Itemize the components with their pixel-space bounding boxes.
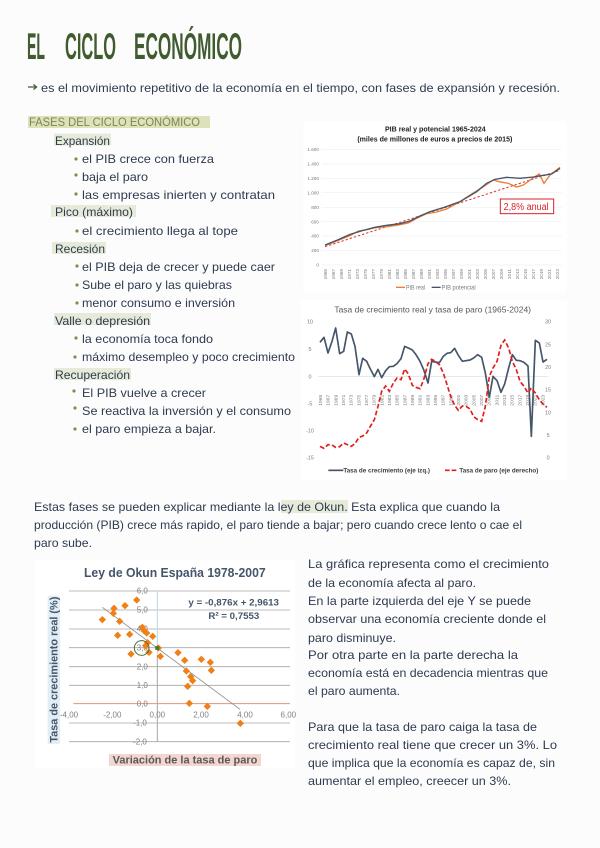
chart: tasa de crecimiento real y tasa de paro: 20 <box>545 365 551 371</box>
explanation text: La gráfica representa como el crecimiento <box>308 558 549 571</box>
chart: tasa de crecimiento real y tasa de paro: 1993 <box>425 394 431 406</box>
chart: PIB real y potencial: 1981 <box>387 269 392 279</box>
chart: PIB real y potencial: 2015 <box>523 269 528 279</box>
chart: ley de Okun España: 2,0 <box>137 662 148 671</box>
chart: ley de Okun España: Ley de Okun España 1978-2007 <box>84 565 266 580</box>
chart: PIB real y potencial: 2013 <box>515 269 520 279</box>
chart: PIB real y potencial: 0 <box>316 263 319 268</box>
heading: fases del ciclo económico: FASES DEL CICLO ECONÓMICO <box>29 114 200 129</box>
title: EL <box>27 26 45 67</box>
chart: PIB real y potencial: 1989 <box>419 269 424 279</box>
chart: PIB real y potencial: 2005 <box>483 269 488 279</box>
explanation text: paro disminuye. <box>308 632 396 645</box>
chart: PIB real y potencial: 2011 <box>507 269 512 279</box>
chart: PIB real y potencial: 800 <box>311 205 319 210</box>
chart: PIB real y potencial: PIB real y potencial 1965-2024 <box>385 125 486 134</box>
phase: expansión <box>54 134 275 202</box>
chart: PIB real y potencial: 2023 <box>555 269 560 279</box>
chart: ley de Okun España: R² = 0,7553 <box>208 611 259 621</box>
chart: tasa de crecimiento real y tasa de paro: 2023 <box>540 394 546 406</box>
chart: PIB real y potencial: 1965 <box>323 269 328 279</box>
text: ECONÓMICO <box>134 25 242 67</box>
paragraph: ley de Okun: paro sube. <box>34 537 92 550</box>
chart: ley de Okun España: 4,00 <box>237 711 253 720</box>
chart: tasa de crecimiento real y tasa de paro: 1977 <box>364 394 370 406</box>
title <box>27 25 242 67</box>
chart: tasa de crecimiento real y tasa de paro: Tasa de crecimiento (eje izq.) <box>343 467 430 474</box>
phase: pico: el crecimiento llega al tope <box>82 225 238 238</box>
chart: ley de Okun España: 1,0 <box>137 681 148 690</box>
chart: tasa de crecimiento real y tasa de paro: 1965 <box>318 394 324 406</box>
phase: recesión: Recesión <box>55 243 105 256</box>
phase: recuperación: Se reactiva la inversión y el consumo <box>82 405 291 418</box>
chart: ley de Okun España: 0,00 <box>150 711 166 720</box>
phase: valle o depresión: la economía toca fondo <box>82 333 213 346</box>
chart: ley de Okun España: 0,0 <box>137 700 148 709</box>
chart: PIB real y potencial: 2,8% anual <box>504 202 549 213</box>
chart: PIB real y potencial: 1.200 <box>307 176 319 181</box>
chart: PIB real y potencial: 1.600 <box>307 147 319 152</box>
chart: tasa de crecimiento real y tasa de paro: 1989 <box>410 394 416 406</box>
chart: PIB real y potencial: 1969 <box>339 269 344 279</box>
chart: PIB real y potencial: 2009 <box>499 269 504 279</box>
chart: ley de Okun España: 4,0 <box>137 625 148 634</box>
explanation text: de la economía afecta al paro. <box>308 577 476 590</box>
chart: tasa de crecimiento real y tasa de paro: 2017 <box>517 394 523 406</box>
chart: tasa de crecimiento real y tasa de paro: Tasa de paro (eje derecho) <box>459 467 538 474</box>
chart: tasa de crecimiento real y tasa de paro: 1969 <box>333 394 339 406</box>
chart: PIB real y potencial: PIB real <box>406 284 425 291</box>
chart: tasa de crecimiento real y tasa de paro: 10 <box>545 410 551 416</box>
chart: tasa de crecimiento real y tasa de paro: 1973 <box>349 394 355 406</box>
phase: recesión: Sube el paro y las quiebras <box>82 279 232 292</box>
chart: PIB real y potencial: 1993 <box>435 269 440 279</box>
chart: PIB real y potencial: 600 <box>311 219 319 224</box>
chart: ley de Okun España: -4,00 <box>60 711 79 720</box>
chart: PIB real y potencial: 400 <box>311 234 319 239</box>
chart: tasa de crecimiento real y tasa de paro: -5 <box>308 401 312 407</box>
chart: PIB real y potencial: 1979 <box>379 269 384 279</box>
chart: tasa de crecimiento real y tasa de paro: 1995 <box>433 394 439 406</box>
chart: tasa de crecimiento real y tasa de paro: 1983 <box>387 394 393 406</box>
chart: tasa de crecimiento real y tasa de paro: -10 <box>306 429 314 435</box>
chart: PIB real y potencial: 2019 <box>539 269 544 279</box>
chart: tasa de crecimiento real y tasa de paro: 5 <box>309 347 312 353</box>
chart: ley de Okun España: Tasa de crecimiento real (%) <box>48 596 60 743</box>
phase: expansión: baja el paro <box>82 171 148 184</box>
chart: ley de Okun España: y = -0,876x + 2,9613 <box>188 598 279 608</box>
chart: ley de Okun España: 3,0 <box>137 644 148 653</box>
chart: tasa de crecimiento real y tasa de paro: 1971 <box>341 394 347 406</box>
chart: tasa de crecimiento real y tasa de paro: 0 <box>309 374 312 380</box>
chart: PIB real y potencial: 1987 <box>411 269 416 279</box>
chart: ley de Okun España: -2,0 <box>133 737 147 746</box>
chart: ley de Okun España: 5,0 <box>137 606 148 615</box>
chart: tasa de crecimiento real y tasa de paro: 2003 <box>464 394 470 406</box>
explanation text: crecimiento real tiene que crecer un 3%. Lo <box>308 739 557 752</box>
paragraph: ley de Okun: Estas fases se pueden explicar mediante la ley de Okun. Esta explica que cuando la <box>34 501 501 514</box>
definition line: es el movimiento repetitivo de la economía en el tiempo, con fases de expansión y recesión. <box>41 82 560 95</box>
explanation text <box>308 558 557 788</box>
phase: valle o depresión: máximo desempleo y poco crecimiento <box>82 351 295 364</box>
title: CICLO <box>65 26 116 67</box>
chart: PIB real y potencial: 200 <box>311 248 319 253</box>
chart: tasa de crecimiento real y tasa de paro: 1987 <box>402 394 408 406</box>
chart: tasa de crecimiento real y tasa de paro: 30 <box>545 320 551 326</box>
chart: tasa de crecimiento real y tasa de paro: 0 <box>547 456 550 462</box>
phase: expansión: el PIB crece con fuerza <box>82 153 215 166</box>
phase: recesión: el PIB deja de crecer y puede caer <box>82 261 275 274</box>
paragraph: ley de Okun: producción (PIB) crece más rapido, el paro tiende a bajar; pero cuando crece lento o cae el <box>34 519 522 532</box>
phase: pico: Pico (máximo) <box>55 206 133 219</box>
phase: expansión: las empresas inierten y contratan <box>82 189 275 202</box>
explanation text: economía está en decadencia mientras que <box>308 667 548 680</box>
chart: ley de Okun España: 6,00 <box>281 711 297 720</box>
chart: tasa de crecimiento real y tasa de paro: 5 <box>547 433 550 439</box>
chart: PIB real y potencial: (miles de millones de euros a precios de 2015) <box>357 135 513 144</box>
chart: PIB real y potencial: 1997 <box>451 269 456 279</box>
chart: tasa de crecimiento real y tasa de paro: 2019 <box>525 394 531 406</box>
chart: PIB real y potencial: 2021 <box>547 269 552 279</box>
chart: tasa de crecimiento real y tasa de paro: 2007 <box>479 394 485 406</box>
chart: ley de Okun España: 6,0 <box>137 587 148 596</box>
chart: PIB real y potencial: 1991 <box>427 269 432 279</box>
chart: tasa de crecimiento real y tasa de paro: 1999 <box>448 394 454 406</box>
chart: tasa de crecimiento real y tasa de paro: 15 <box>545 388 551 394</box>
chart: tasa de crecimiento real y tasa de paro: 1997 <box>441 394 447 406</box>
chart: tasa de crecimiento real y tasa de paro: 1975 <box>356 394 362 406</box>
explanation text: Para que la tasa de paro caiga la tasa de <box>308 721 537 734</box>
chart: PIB real y potencial: 1.000 <box>307 190 319 195</box>
chart: tasa de crecimiento real y tasa de paro: 1981 <box>379 394 385 406</box>
phase: recuperación: Recuperación <box>55 369 130 382</box>
chart: PIB real y potencial: 1973 <box>355 269 360 279</box>
explanation text: aumentar el empleo, creecer un 3%. <box>308 775 511 788</box>
chart: tasa de crecimiento real y tasa de paro: 1991 <box>418 394 424 406</box>
chart: tasa de crecimiento real y tasa de paro: 25 <box>545 343 551 349</box>
chart: ley de Okun España <box>35 560 297 768</box>
phase: recesión <box>52 242 275 310</box>
chart: tasa de crecimiento real y tasa de paro: -15 <box>306 456 314 462</box>
chart: PIB real y potencial: 2007 <box>491 269 496 279</box>
paragraph: ley de Okun <box>34 500 522 550</box>
chart: PIB real y potencial: 1975 <box>363 269 368 279</box>
explanation text: Por otra parte en la parte derecha la <box>308 649 519 662</box>
phase: expansión: Expansión <box>55 135 110 148</box>
chart: tasa de crecimiento real y tasa de paro: 2015 <box>510 394 516 406</box>
phase: recuperación: El PIB vuelve a crecer <box>82 387 206 400</box>
chart: ley de Okun España: -1,0 <box>133 719 147 728</box>
chart: PIB real y potencial: 2001 <box>467 269 472 279</box>
chart: tasa de crecimiento real y tasa de paro: 10 <box>307 320 313 326</box>
chart: PIB real y potencial: 1985 <box>403 269 408 279</box>
chart: tasa de crecimiento real y tasa de paro: 1985 <box>395 394 401 406</box>
chart: tasa de crecimiento real y tasa de paro: Tasa de crecimiento real y tasa de paro (1965-2024) <box>334 305 531 315</box>
phase: recuperación <box>54 368 291 436</box>
phase: recesión: menor consumo e inversión <box>82 297 235 310</box>
chart: PIB real y potencial: 1999 <box>459 269 464 279</box>
explanation text: En la parte izquierda del eje Y se puede <box>308 595 531 608</box>
chart: PIB real y potencial <box>303 121 567 293</box>
chart: PIB real y potencial: 2003 <box>475 269 480 279</box>
chart: tasa de crecimiento real y tasa de paro: 2011 <box>494 394 500 405</box>
chart: tasa de crecimiento real y tasa de paro: 2005 <box>471 394 477 406</box>
chart: tasa de crecimiento real y tasa de paro: 1967 <box>326 394 332 406</box>
chart: ley de Okun España: Variación de la tasa de paro <box>113 755 258 767</box>
chart: tasa de crecimiento real y tasa de paro: 2021 <box>533 394 539 406</box>
chart: tasa de crecimiento real y tasa de paro: 2009 <box>487 394 493 406</box>
chart: PIB real y potencial: 1977 <box>371 269 376 279</box>
phase: recuperación: el paro empieza a bajar. <box>82 423 216 436</box>
phase: pico <box>51 205 238 238</box>
chart: tasa de crecimiento real y tasa de paro: 2013 <box>502 394 508 406</box>
chart: PIB real y potencial: 2017 <box>531 269 536 279</box>
chart: ley de Okun España: -2,00 <box>103 711 122 720</box>
chart: PIB real y potencial: 1983 <box>395 269 400 279</box>
explanation text: el paro aumenta. <box>308 685 400 698</box>
chart: tasa de crecimiento real y tasa de paro: 1979 <box>372 394 378 406</box>
chart: tasa de crecimiento real y tasa de paro: 2001 <box>456 394 462 406</box>
phase: valle o depresión <box>54 313 295 364</box>
chart: PIB real y potencial: 1971 <box>347 269 352 279</box>
explanation text: que implica que la economía es capaz de, sin <box>308 757 555 770</box>
phase: valle o depresión: Valle o depresión <box>55 315 150 328</box>
chart: PIB real y potencial: 1967 <box>331 269 336 279</box>
chart: PIB real y potencial: PIB potencial <box>442 284 476 291</box>
chart: tasa de crecimiento real y tasa de paro <box>301 300 567 480</box>
chart: PIB real y potencial: 1.400 <box>307 162 319 167</box>
chart: ley de Okun España: 2,00 <box>193 711 209 720</box>
explanation text: observar una economía creciente donde el <box>308 613 546 626</box>
chart: PIB real y potencial: 1995 <box>443 269 448 279</box>
